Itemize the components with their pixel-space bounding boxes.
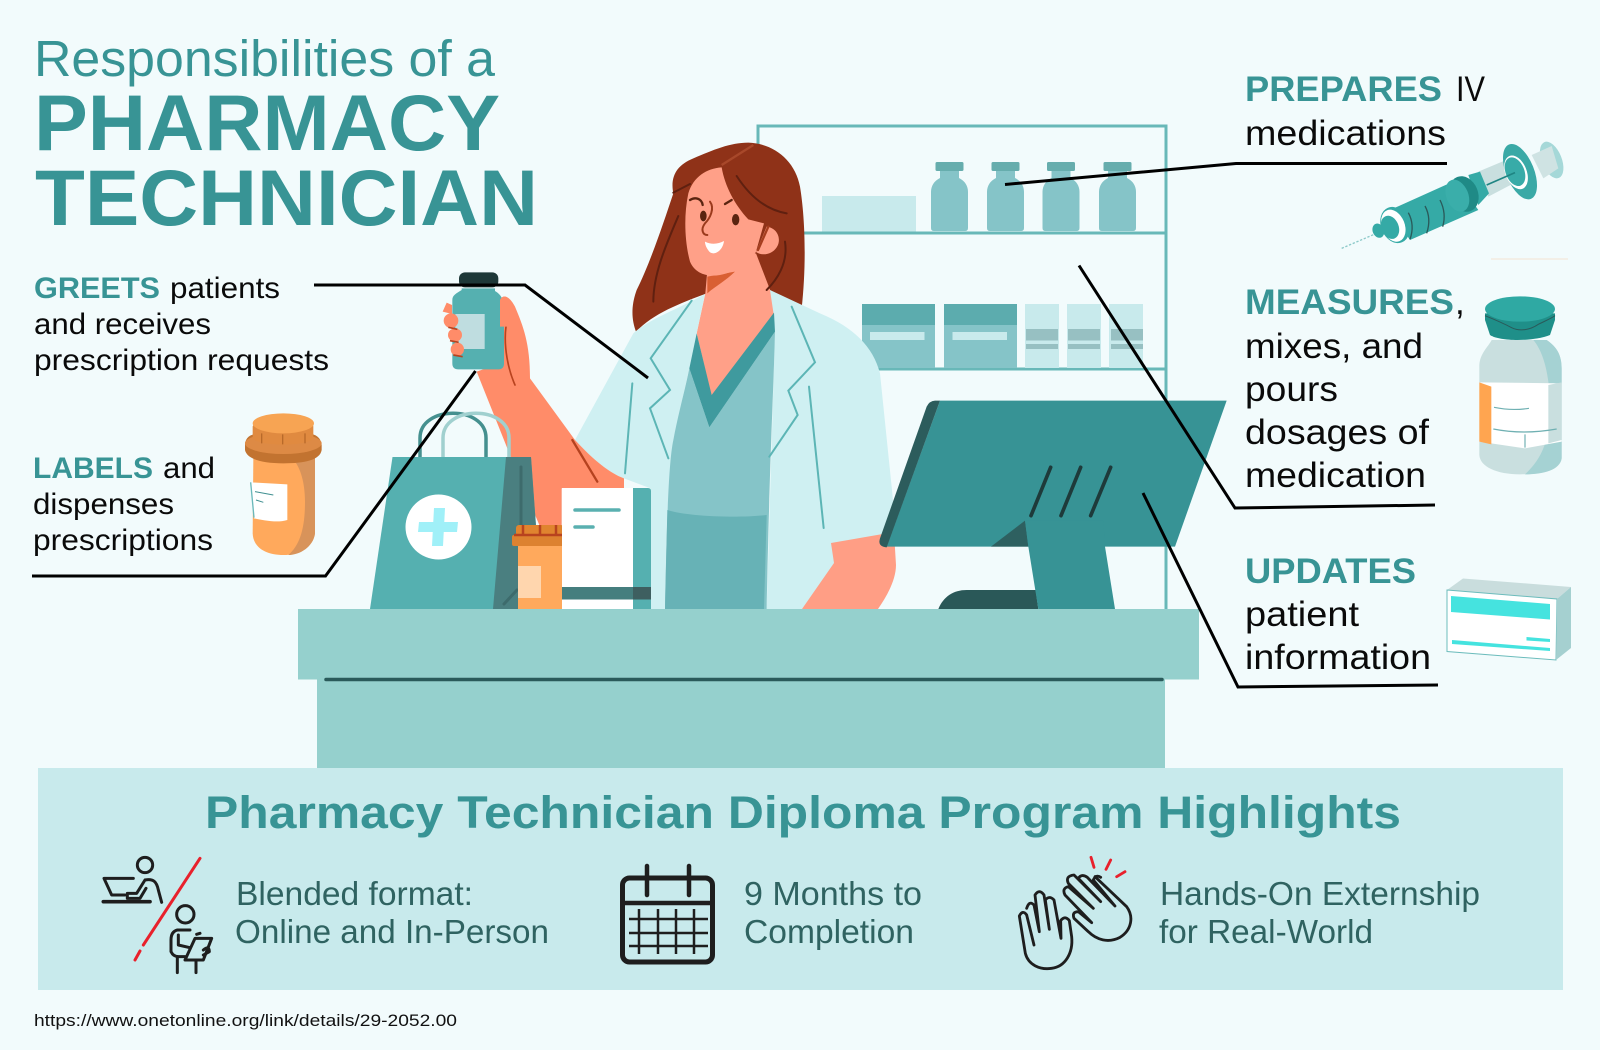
title: PHARMACY — [34, 78, 500, 167]
callout: labels: and — [163, 452, 215, 485]
neck and chest — [697, 253, 774, 397]
title: Responsibilities of a — [34, 30, 496, 87]
callout: labels: dispenses — [33, 488, 174, 521]
highlight text: format: Online and In-Person — [235, 913, 549, 950]
callout: updates: UPDATES — [1245, 552, 1416, 591]
callout: greets: patients — [170, 272, 280, 305]
ear — [756, 227, 779, 254]
highlight text: externship: for Real-World — [1159, 913, 1373, 950]
face — [685, 167, 764, 276]
counter — [298, 609, 1199, 768]
callout: measures: pours — [1245, 370, 1338, 409]
callout: prepares: medications — [1245, 114, 1446, 153]
source url: https://www.onetonline.org/link/details/29-2052.00 — [34, 1011, 457, 1030]
small orange bottle on counter — [512, 525, 564, 609]
panel: program highlights — [38, 768, 1563, 990]
panel heading: Pharmacy Technician Diploma Program Highlights — [205, 787, 1401, 838]
callout: measures: dosages of — [1245, 413, 1429, 452]
highlight text: format: Blended format: — [236, 875, 473, 912]
icon: medicine box — [1447, 578, 1571, 660]
leader line: measures — [1079, 266, 1435, 508]
computer monitor — [879, 401, 1227, 609]
scrub top — [665, 332, 775, 609]
callout: updates — [1245, 552, 1431, 677]
callout: prepares: IV — [1456, 70, 1486, 109]
title — [34, 30, 538, 242]
hair — [632, 143, 805, 332]
callout: updates: patient — [1245, 595, 1359, 634]
highlight text: duration — [744, 875, 922, 950]
elbow crease — [572, 440, 597, 482]
callout: prepares: PREPARES — [1245, 70, 1442, 109]
callout: updates: information — [1245, 638, 1431, 677]
medicine bottle — [452, 272, 504, 369]
leader line: prepares — [1005, 164, 1447, 184]
callout: measures: MEASURES — [1245, 283, 1454, 322]
leader line: greets — [314, 285, 648, 378]
pharmacy shelf unit — [758, 126, 1166, 609]
highlight text: duration: 9 Months to — [744, 875, 922, 912]
leader line: labels — [32, 371, 476, 576]
shopping bag — [370, 413, 542, 609]
callout: greets: GREETS — [34, 272, 160, 305]
thumb crease and fingers — [443, 297, 515, 385]
callout: labels — [33, 452, 215, 557]
facial features — [690, 198, 768, 253]
scrub collar — [689, 313, 775, 427]
title: TECHNICIAN — [35, 153, 538, 242]
scrub lower shade — [665, 510, 767, 609]
highlight text: externship — [1159, 875, 1480, 950]
callout: measures: mixes, and — [1245, 327, 1423, 366]
highlight text: duration: Completion — [744, 913, 914, 950]
icon: clapping hands — [1019, 857, 1131, 969]
icon: medicine vial — [1479, 296, 1562, 474]
icon: calendar — [622, 866, 712, 962]
callout: prepares — [1245, 70, 1486, 153]
callout: greets: and receives — [34, 308, 211, 341]
lower right arm — [802, 532, 896, 609]
neck shadow — [707, 272, 735, 293]
lab coat — [575, 290, 896, 609]
callout: greets — [34, 272, 329, 377]
callout: labels: prescriptions — [33, 524, 213, 557]
callout: measures: , — [1455, 283, 1465, 322]
leader line: updates — [1143, 493, 1438, 687]
raised forearm and hand — [477, 297, 624, 527]
book on counter — [562, 488, 651, 609]
icon: online and in-person students — [103, 857, 212, 973]
icon: orange prescription bottle — [245, 413, 322, 555]
callout: measures — [1245, 283, 1465, 495]
coat lapels and seams — [625, 301, 824, 528]
faint line under syringe — [1491, 258, 1568, 260]
pharmacist figure — [443, 143, 896, 609]
callout: labels: LABELS — [33, 452, 153, 485]
hair strands — [722, 145, 753, 165]
icon: syringe — [1342, 138, 1568, 248]
callout: measures: medication — [1245, 456, 1426, 495]
highlight text: externship: Hands-On Externship — [1160, 875, 1480, 912]
highlight text: format — [235, 875, 549, 950]
callout: greets: prescription requests — [34, 344, 329, 377]
